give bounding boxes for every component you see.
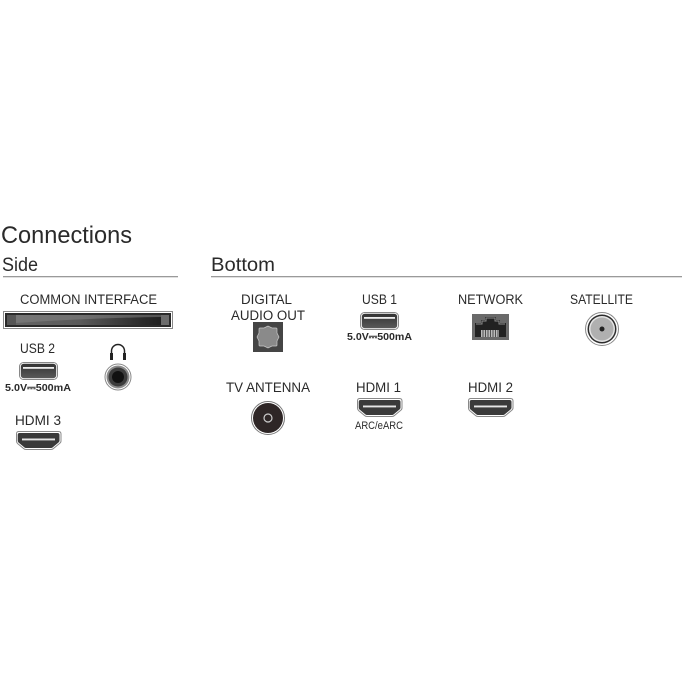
hdmi 2 port: [468, 398, 513, 416]
hdmi 2 label: HDMI 2: [468, 379, 513, 395]
heading: side: Side: [2, 255, 38, 276]
network label: NETWORK: [458, 292, 523, 307]
digital audio out port: [253, 322, 283, 352]
common interface label: COMMON INTERFACE: [20, 292, 157, 307]
usb 2 rating: 5.0V⎓500mA: [5, 383, 71, 394]
usb 1 port: [360, 312, 398, 330]
panel: side: [2, 255, 178, 450]
satellite label: SATELLITE: [570, 292, 633, 307]
digital audio out label: DIGITAL: [241, 292, 292, 307]
tv antenna label: TV ANTENNA: [226, 380, 310, 395]
usb 2 port: [20, 362, 58, 380]
hdmi 1 note: ARC/eARC: [355, 420, 403, 432]
hdmi 3 port: [16, 432, 61, 450]
common interface slot: [4, 312, 172, 328]
title: Connections: [1, 222, 132, 249]
hdmi 1 port: [358, 398, 402, 416]
panel: bottom: [211, 255, 682, 434]
tv antenna port: [252, 402, 284, 434]
usb 2 label: USB 2: [20, 340, 55, 356]
headphone jack: [105, 364, 131, 390]
satellite port: [586, 312, 618, 346]
digital audio out label: AUDIO OUT: [231, 308, 305, 323]
hdmi 1 label: HDMI 1: [356, 379, 401, 395]
usb 1 label: USB 1: [362, 291, 397, 307]
usb 1 rating: 5.0V⎓500mA: [347, 332, 412, 343]
heading: bottom: Bottom: [211, 255, 275, 276]
hdmi 3 label: HDMI 3: [15, 412, 61, 428]
digital audio out label: [231, 292, 305, 323]
icon: headphones: [110, 345, 126, 360]
network port: [472, 314, 509, 340]
